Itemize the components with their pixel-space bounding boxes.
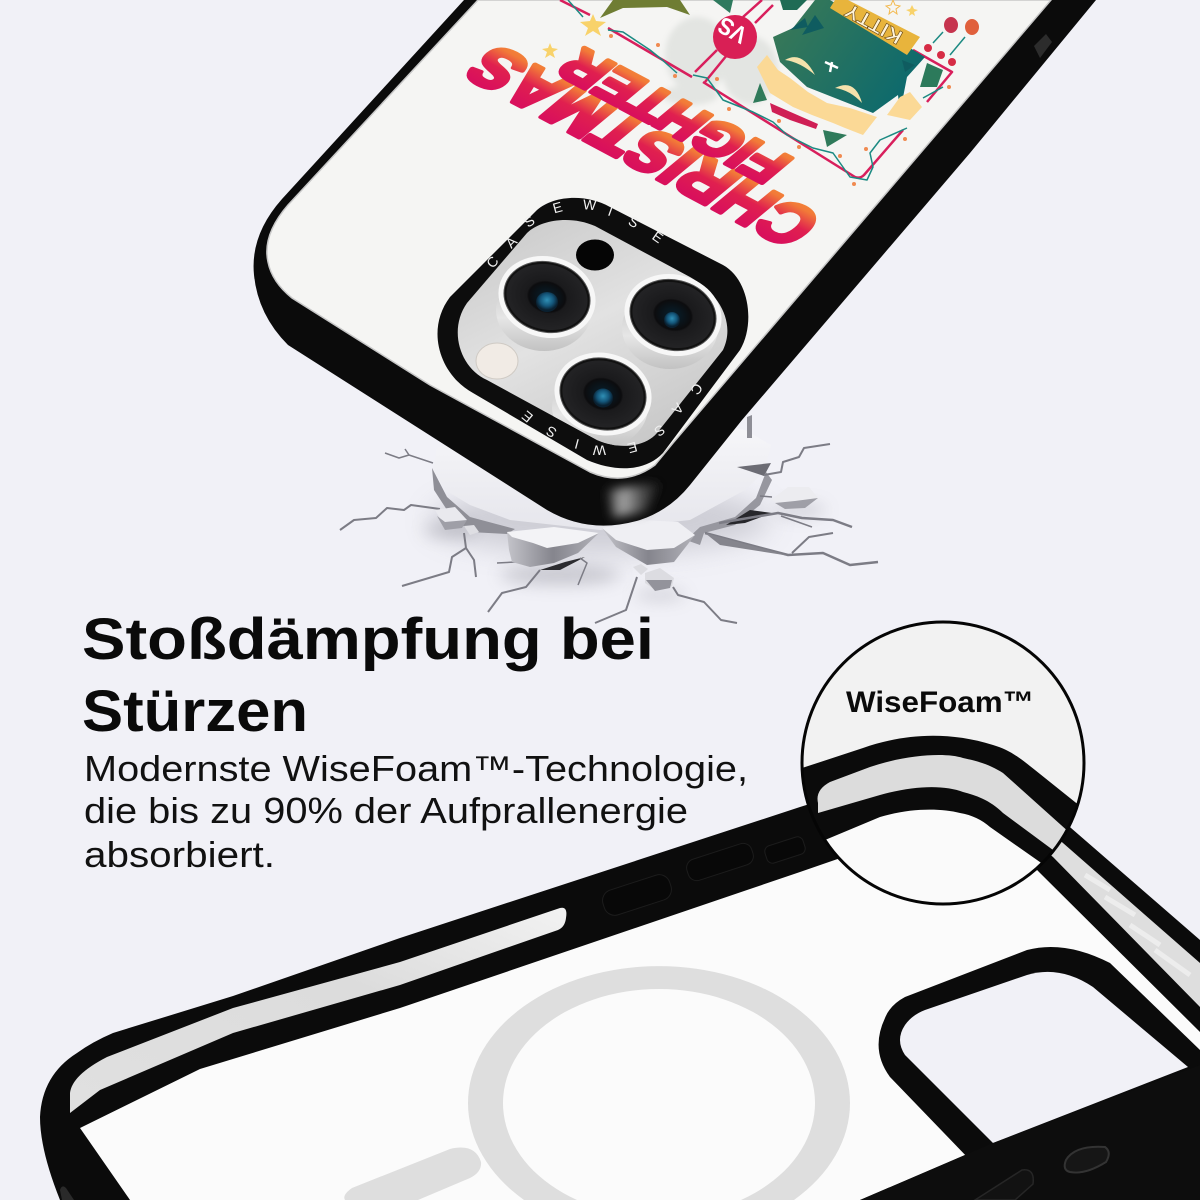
clear foam strip left	[70, 908, 566, 1113]
body text: absorbiert.	[84, 834, 275, 875]
phone with case, top	[254, 0, 1096, 526]
magnified case corner	[804, 736, 1076, 862]
artwork: christmas fighter	[542, 0, 979, 186]
monster eyes	[785, 57, 862, 103]
kitty label	[830, 0, 920, 55]
camera cutout	[879, 947, 1200, 1160]
flash	[476, 343, 518, 379]
clear interior	[80, 825, 1200, 1200]
wisefoam label: WiseFoam™	[846, 686, 1034, 719]
casewise text top: CASEWISE	[483, 196, 666, 271]
balloons and bunting	[924, 17, 979, 66]
camera ring	[438, 196, 748, 468]
stars	[542, 0, 918, 58]
body text	[84, 748, 748, 875]
lens two	[616, 264, 730, 366]
title: christmas: CHRISTMAS	[450, 35, 837, 258]
rock fragment centre	[602, 520, 695, 565]
string lights	[568, 0, 965, 180]
heading: Stoßdämpfung bei	[82, 607, 654, 672]
illustration: cracked ground impact	[340, 415, 878, 623]
bottom button	[975, 1170, 1033, 1200]
bottom band	[860, 1065, 1200, 1200]
vs badge: VS	[713, 11, 752, 48]
case frame	[40, 756, 1200, 1200]
heading	[82, 607, 654, 744]
legs and accents	[753, 83, 767, 103]
body text: Modernste WiseFoam™-Technologie,	[84, 748, 748, 789]
body text: die bis zu 90% der Aufprallenergie	[84, 790, 688, 831]
lens barrels	[496, 312, 717, 446]
lens one	[490, 246, 604, 348]
open case, bottom	[40, 756, 1200, 1200]
title: fighter: FIGHTER	[544, 40, 804, 193]
clear foam strip right	[1015, 815, 1200, 1007]
kitty label: KITTY	[841, 0, 906, 48]
side port left	[60, 1186, 74, 1200]
magsafe ring	[468, 966, 850, 1200]
rock fragment left	[507, 527, 599, 567]
case side button	[1034, 34, 1052, 58]
monster body	[773, 0, 925, 113]
cream fur	[757, 55, 877, 135]
microphone	[576, 240, 614, 270]
back panel	[267, 0, 1051, 478]
smoke	[662, 17, 778, 105]
olive tree tops	[600, 0, 690, 18]
heading: Stürzen	[82, 679, 308, 744]
bottom port	[1065, 1147, 1109, 1173]
lens three	[546, 342, 660, 446]
case bumper	[254, 0, 1096, 526]
frame lines	[560, 0, 952, 178]
magnifier callout: wisefoam	[800, 620, 1086, 906]
casewise text bottom: CASEWISE	[518, 380, 706, 458]
volume buttons	[600, 835, 807, 918]
vs badge	[713, 11, 757, 59]
magsafe alignment pill	[344, 1148, 481, 1200]
small rocks	[435, 487, 818, 591]
